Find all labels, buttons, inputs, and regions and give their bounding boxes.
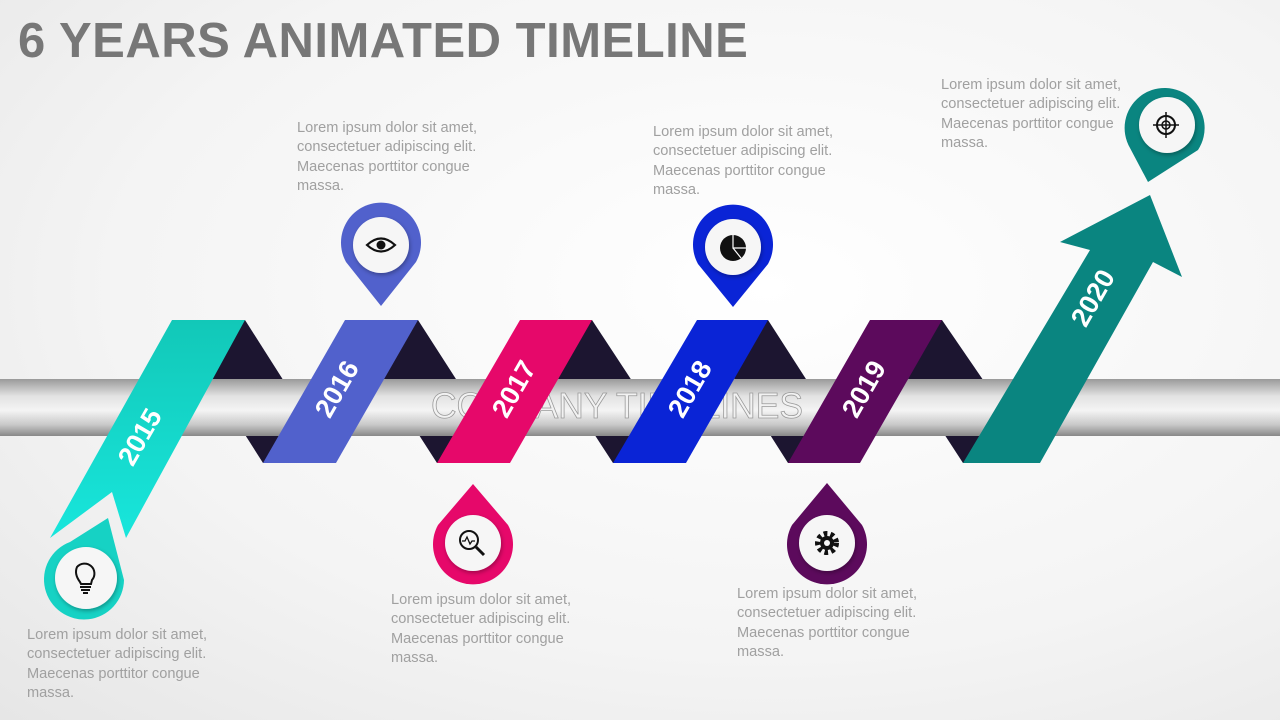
arrow 2020: 2020: [1065, 264, 1121, 332]
ribbon 2017: [437, 320, 592, 463]
text 2018: Lorem ipsum dolor sit amet, consectetuer adipiscing elit. Maecenas porttitor congue massa.: [653, 124, 833, 198]
ribbon 2015: [50, 320, 245, 538]
pin 2017: magnifier: [433, 484, 513, 584]
ribbon 2017: 2017: [486, 355, 542, 423]
ribbon 2016: [263, 320, 418, 463]
ribbon 2019: 2019: [836, 355, 892, 423]
text 2017: Lorem ipsum dolor sit amet, consectetuer adipiscing elit. Maecenas porttitor congue massa.: [391, 592, 571, 666]
text 2015: Lorem ipsum dolor sit amet, consectetuer adipiscing elit. Maecenas porttitor congue massa.: [27, 627, 207, 701]
title: 6 YEARS ANIMATED TIMELINE: [18, 14, 748, 68]
text 2016: Lorem ipsum dolor sit amet, consectetuer adipiscing elit. Maecenas porttitor congue massa.: [297, 120, 477, 194]
pin 2018: pie chart: [693, 205, 773, 307]
ribbon 2016: 2016: [309, 355, 365, 423]
pin 2016: eye: [341, 203, 421, 306]
ribbon 2019: [788, 320, 942, 463]
bar caption: COMPANY TIMELINES: [431, 385, 803, 426]
pin 2015: lightbulb: [44, 518, 124, 619]
ribbon 2018: [613, 320, 768, 463]
arrow 2020: [963, 195, 1182, 463]
text 2019: Lorem ipsum dolor sit amet, consectetuer adipiscing elit. Maecenas porttitor congue massa.: [737, 586, 917, 660]
text 2020: Lorem ipsum dolor sit amet, consectetuer adipiscing elit. Maecenas porttitor congue massa.: [941, 77, 1121, 151]
ribbon 2018: 2018: [662, 355, 718, 423]
back ribbon pieces: [172, 320, 1040, 463]
pin 2019: gear: [787, 483, 867, 584]
pin 2020: target: [1125, 88, 1205, 182]
ribbon 2015: 2015: [112, 403, 168, 471]
cylinder bar: [0, 379, 1280, 436]
